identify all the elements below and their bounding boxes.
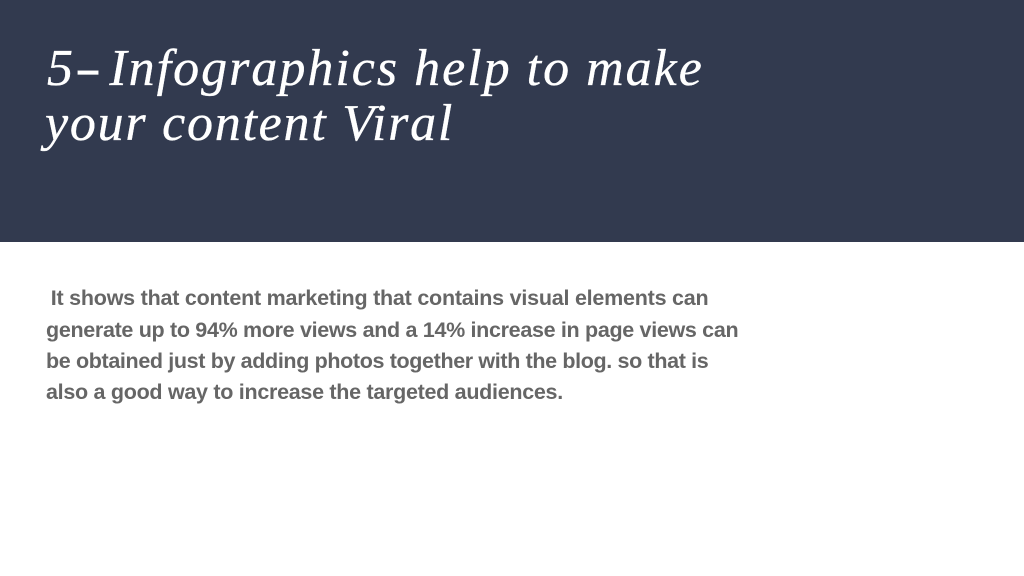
body text block: also a good way to increase the targeted audiences. bbox=[46, 380, 563, 404]
body text block bbox=[46, 286, 738, 404]
body text block: generate up to 94% more views and a 14% increase in page views can bbox=[46, 318, 738, 342]
title: - bbox=[75, 40, 104, 97]
title bbox=[40, 40, 704, 152]
body text block: It shows that content marketing that contains visual elements can bbox=[51, 286, 708, 310]
title: 5 Infographics help to make bbox=[47, 40, 704, 97]
body text block: be obtained just by adding photos together with the blog. so that is bbox=[46, 349, 708, 373]
title: your content Viral bbox=[45, 95, 454, 152]
header band bbox=[0, 0, 1024, 242]
